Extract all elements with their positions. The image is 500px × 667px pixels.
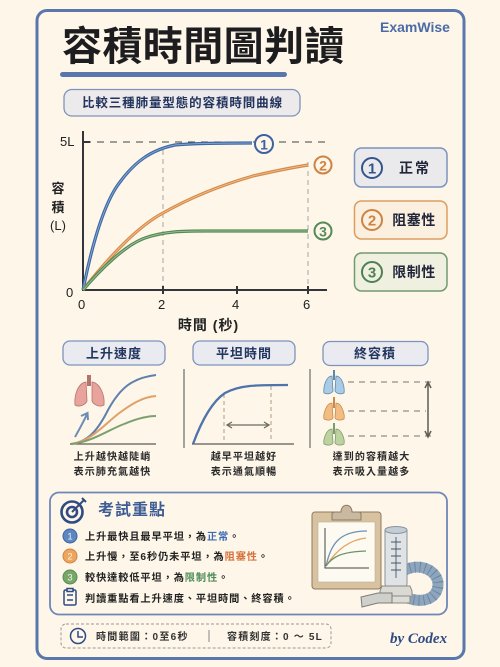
legend: normal: 正常 xyxy=(399,160,431,176)
panel: exam key points xyxy=(50,492,447,614)
key point 3: 3 xyxy=(67,572,73,584)
caption: final volume: 表示吸入量越多 xyxy=(333,465,410,478)
title: 容積時間圖判讀 xyxy=(62,25,345,69)
mini chart: plateau xyxy=(184,369,294,448)
legend: obstructive: 2 xyxy=(368,212,376,230)
mini chart: rise curves xyxy=(70,375,156,444)
axis tick labels: 5L xyxy=(60,134,74,149)
curve label 2: 2 xyxy=(319,158,327,174)
legend xyxy=(354,148,447,291)
legend: normal: 1 xyxy=(368,160,376,178)
legend: normal xyxy=(354,148,447,187)
key point 3: 較快達較低平坦，為限制性。 xyxy=(85,571,229,584)
y axis title: 容 xyxy=(51,181,65,196)
axis tick labels: 6 xyxy=(303,297,310,312)
curve label 3: 3 xyxy=(319,224,327,240)
illustration: clipboard xyxy=(312,505,381,589)
curve label 1: 1 xyxy=(260,136,268,152)
panel: rise speed xyxy=(63,341,165,478)
axis tick labels xyxy=(60,134,310,312)
divider line xyxy=(309,369,311,448)
axis tick labels: 0 xyxy=(78,297,85,312)
subtitle pill xyxy=(64,90,300,116)
curve: restrictive xyxy=(83,231,308,290)
axis tick labels: 2 xyxy=(158,297,165,312)
legend: restrictive: 3 xyxy=(368,264,376,282)
icon: lungs green xyxy=(324,423,344,445)
legend: restrictive: 限制性 xyxy=(392,264,436,280)
brand: ExamWise: ExamWise xyxy=(380,19,450,35)
heading: final volume: 終容積 xyxy=(354,346,396,361)
caption: plateau time: 表示通氣順暢 xyxy=(211,465,277,478)
legend: restrictive xyxy=(354,253,447,291)
heading: plateau time: 平坦時間 xyxy=(216,346,272,361)
key point 4 xyxy=(64,588,296,605)
caption: rise speed: 表示肺充氣越快 xyxy=(74,465,151,478)
icon: rising arrow xyxy=(75,413,88,437)
footer text: volume scale: 容積刻度：0 ～ 5L xyxy=(227,630,323,643)
icon: target xyxy=(62,498,86,522)
illustration: spirometer xyxy=(361,526,438,607)
caption: final volume xyxy=(333,450,410,478)
key point 3 xyxy=(63,570,229,584)
icon: lungs blue xyxy=(324,370,344,394)
caption: plateau time xyxy=(211,450,277,478)
x axis title: 時間 (秒) xyxy=(178,317,239,333)
legend: obstructive xyxy=(354,201,447,239)
curve: obstructive xyxy=(83,165,308,290)
caption: rise speed xyxy=(74,450,151,478)
panel: plateau time xyxy=(184,341,295,478)
key point 1 xyxy=(63,529,240,543)
panel: final volume xyxy=(310,342,436,478)
curve label 1 xyxy=(255,135,273,153)
y axis title: (L) xyxy=(50,218,66,233)
axes xyxy=(82,131,327,294)
heading: key points: 考試重點 xyxy=(98,500,166,519)
footer text: time range: 時間範圍：0至6秒 xyxy=(96,630,189,643)
heading: rise speed: 上升速度 xyxy=(86,346,142,361)
key point 1: 1 xyxy=(67,532,73,542)
icon: clock xyxy=(70,628,86,644)
icon: lungs orange xyxy=(324,397,344,420)
legend: obstructive: 阻塞性 xyxy=(392,212,436,228)
curve label 2 xyxy=(314,156,332,174)
caption: rise speed: 上升越快越陡峭 xyxy=(74,450,151,463)
caption: plateau time: 越早平坦越好 xyxy=(211,450,277,463)
caption: final volume: 達到的容積越大 xyxy=(333,450,410,463)
reference dashed lines xyxy=(84,142,327,290)
key point 1: 上升最快且最早平坦，為正常。 xyxy=(85,530,240,543)
subtitle pill: 比較三種肺量型態的容積時間曲線 xyxy=(82,95,283,110)
axis tick labels: 0 xyxy=(66,285,73,300)
y axis title xyxy=(50,181,66,233)
signature: by Codex xyxy=(390,631,448,647)
footer range box xyxy=(61,624,331,648)
curve: normal xyxy=(83,143,252,290)
title underline xyxy=(60,72,287,77)
key point 4: 判讀重點看上升速度、平坦時間、終容積。 xyxy=(85,592,296,605)
icon: lungs xyxy=(75,375,104,406)
curve label 3 xyxy=(314,222,332,240)
main chart: volume-time curves xyxy=(50,131,332,333)
axis tick labels: 4 xyxy=(232,297,239,312)
volume guide lines and arrow xyxy=(348,382,436,437)
y axis title: 積 xyxy=(51,200,65,215)
key point 2: 2 xyxy=(67,552,73,562)
key point 2: 上升慢，至6秒仍未平坦，為阻塞性。 xyxy=(85,550,269,563)
